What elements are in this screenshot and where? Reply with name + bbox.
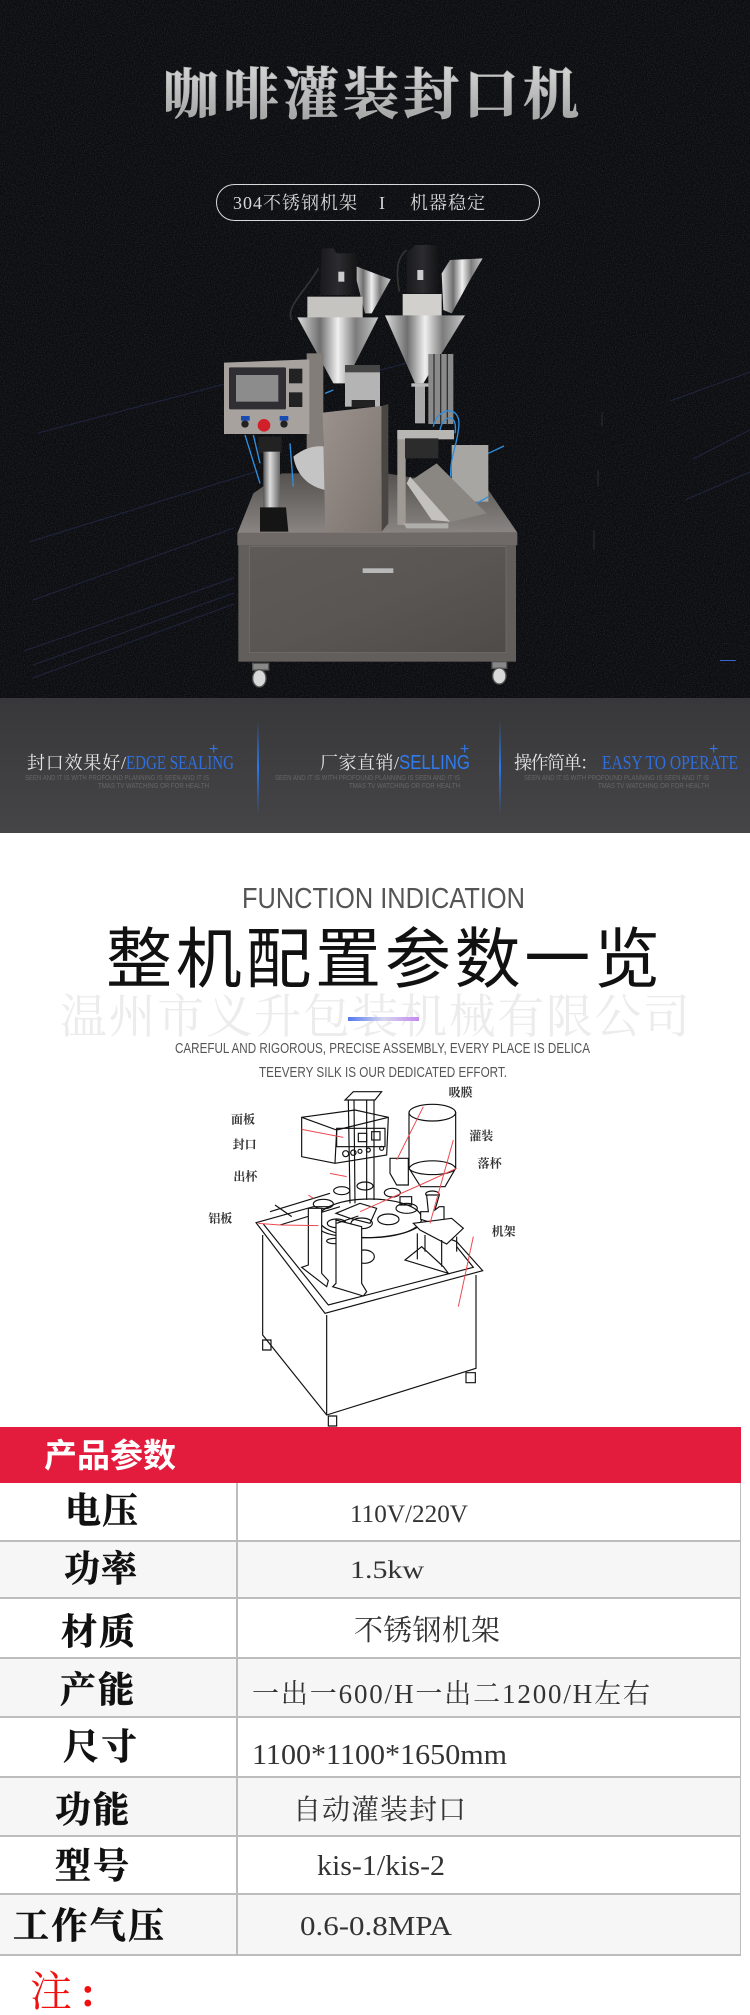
row: material: 不锈钢机架 xyxy=(354,1614,500,1647)
feature: easy to operate: 操作简单： xyxy=(514,753,598,773)
row: working pressure xyxy=(13,1898,453,1949)
machine: control panel xyxy=(224,359,309,434)
row: material: 材质 xyxy=(61,1604,135,1655)
machine: support column xyxy=(258,437,288,532)
feature: selling: TMAS TV WATCHING OR FOR HEALTH xyxy=(349,781,460,790)
feature: easy to operate: + xyxy=(709,741,718,758)
row: function: 功能 xyxy=(55,1782,129,1833)
machine: back motors and hoppers xyxy=(290,245,483,453)
diagram: part labels: 出杯 xyxy=(233,1168,258,1185)
diagram: hopper xyxy=(390,1104,456,1223)
machine: cup slide and frame xyxy=(397,430,488,528)
machine: blue air tubes xyxy=(245,390,504,503)
feature: edge sealing: SEEN AND IT IS WITH PROFOUND PLANNING IS SEEN AND IT IS xyxy=(25,773,209,782)
row: working pressure: 0.6-0.8MPA xyxy=(300,1911,453,1941)
line diagram of machine xyxy=(208,1083,516,1426)
row: function: 自动灌装封口 xyxy=(293,1794,466,1826)
diagram: filler mount plate xyxy=(405,1218,463,1273)
panel: feature banner xyxy=(0,698,750,833)
feature: selling xyxy=(275,741,470,790)
diagram: table base xyxy=(256,1207,483,1426)
table header: 产品参数 xyxy=(44,1437,176,1474)
note label xyxy=(30,1970,95,2015)
pill: stainless frame tagline: 机器稳定 xyxy=(410,193,485,213)
divider line right xyxy=(499,720,501,815)
feature: easy to operate: TMAS TV WATCHING OR FOR HEALTH xyxy=(598,781,709,790)
row: capacity xyxy=(60,1662,650,1713)
feature: selling: SELLING xyxy=(399,752,470,774)
row: size: 尺寸 xyxy=(63,1719,137,1770)
row: voltage xyxy=(65,1483,468,1534)
diagram: part labels: 吸膜 xyxy=(449,1083,473,1100)
row: voltage: 110V/220V xyxy=(350,1501,468,1528)
row: power xyxy=(64,1541,424,1592)
machine: stainless table and cabinet xyxy=(237,473,517,662)
row: function xyxy=(55,1782,466,1833)
row: model xyxy=(55,1838,445,1889)
feature: edge sealing: TMAS TV WATCHING OR FOR HEALTH xyxy=(98,781,209,790)
machine photo xyxy=(224,245,517,687)
row: power: 功率 xyxy=(64,1541,138,1592)
diagram: turntable xyxy=(313,1182,422,1263)
watermark: company name: 温州市义升包装机械有限公司 xyxy=(60,980,690,1047)
divider line left xyxy=(257,720,259,815)
row: working pressure: 工作气压 xyxy=(13,1898,164,1949)
row: size: 1100*1100*1650mm xyxy=(252,1740,507,1771)
feature: edge sealing xyxy=(25,741,234,790)
row: model: kis-1/kis-2 xyxy=(317,1851,445,1882)
diagram: part labels: 封口 xyxy=(233,1136,257,1153)
diagram: part labels: 面板 xyxy=(231,1110,255,1127)
heading: function indication: FUNCTION INDICATION xyxy=(242,883,525,915)
table header xyxy=(0,1427,741,1483)
diagram: part labels: 落杯 xyxy=(478,1154,503,1171)
panel: hero background xyxy=(0,0,750,698)
pill: stainless frame tagline xyxy=(216,184,540,220)
note label: : xyxy=(81,1970,95,2015)
machine: turntable xyxy=(293,446,325,490)
pill: stainless frame tagline: 304不锈钢机架 xyxy=(233,193,357,213)
machine: wheels xyxy=(253,662,507,687)
feature: easy to operate xyxy=(514,741,738,790)
feature: edge sealing: + xyxy=(209,741,218,758)
pill: stainless frame tagline: I xyxy=(379,193,385,213)
diagram: part labels: 灌装 xyxy=(469,1127,493,1144)
diagram: vertical column xyxy=(345,1092,382,1203)
feature: easy to operate: SEEN AND IT IS WITH PROFOUND PLANNING IS SEEN AND IT IS xyxy=(524,773,709,782)
table row backgrounds xyxy=(0,1541,741,1955)
feature: selling: + xyxy=(460,741,469,758)
diagram: control box xyxy=(302,1110,388,1163)
diagram: red leader lines xyxy=(258,1107,473,1307)
row: model: 型号 xyxy=(55,1838,129,1889)
row: capacity: 产能 xyxy=(60,1662,134,1713)
row: size xyxy=(63,1719,507,1771)
note label: 注 xyxy=(30,1970,72,2015)
panel: product parameter table xyxy=(0,1427,741,1956)
row: material xyxy=(61,1604,500,1655)
feature: selling: 厂家直销/ xyxy=(320,753,399,773)
diagram: part labels: 机架 xyxy=(492,1223,516,1240)
caption text xyxy=(175,1041,590,1081)
row: capacity: 一出一600/H一出二1200/H左右 xyxy=(252,1679,650,1709)
diagram: part labels: 铝板 xyxy=(208,1210,232,1227)
diagram: part labels xyxy=(208,1083,516,1240)
feature: selling: SEEN AND IT IS WITH PROFOUND PLANNING IS SEEN AND IT IS xyxy=(275,773,460,782)
row: power: 1.5kw xyxy=(350,1557,424,1584)
feature: edge sealing: EDGE SEALING xyxy=(126,752,234,774)
accent bar xyxy=(348,1017,419,1021)
feature: edge sealing: 封口效果好/ xyxy=(27,753,126,773)
caption text: CAREFUL AND RIGOROUS, PRECISE ASSEMBLY, EVERY PLACE IS DELICA xyxy=(175,1041,590,1057)
title: 咖啡灌装封口机 xyxy=(163,51,579,131)
diagram: outfeed rails and supports xyxy=(270,1193,412,1296)
row: voltage: 电压 xyxy=(65,1483,138,1534)
heading: full machine configuration: 整机配置参数一览 xyxy=(106,922,660,996)
caption text: TEEVERY SILK IS OUR DEDICATED EFFORT. xyxy=(259,1065,507,1081)
machine: center housing xyxy=(323,404,388,533)
